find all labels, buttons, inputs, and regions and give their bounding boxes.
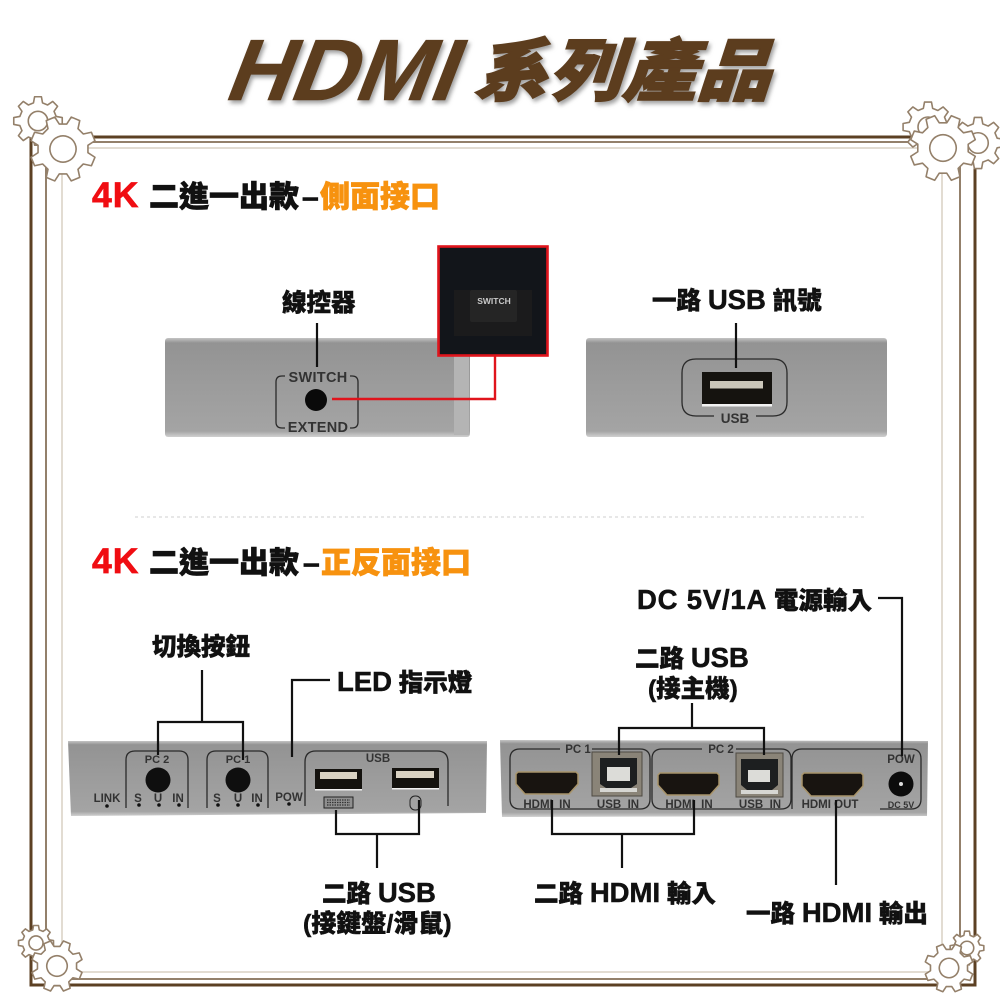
PC 2 group bracket — [126, 751, 188, 808]
heading: side ports: – — [302, 181, 319, 214]
label: two HDMI inputs: 二路 HDMI 輸入 — [534, 877, 716, 908]
callout: switch close-up — [438, 246, 548, 356]
title: 系列產品 — [468, 34, 790, 110]
device body: front — [68, 741, 487, 816]
rear panel labels: HDMI IN — [523, 799, 571, 811]
rear panel labels: HDMI IN — [665, 799, 713, 811]
rear panel labels — [523, 744, 915, 811]
front panel labels: S — [213, 793, 221, 805]
label: two USB keyboard and mouse: 二路 USB — [322, 877, 436, 908]
indicator dots — [105, 802, 291, 808]
PC 2 bracket — [652, 749, 791, 809]
label: one USB signal: 一路 USB 訊號 — [652, 284, 822, 315]
heading: front and rear ports: 正反面接口 — [321, 547, 471, 580]
HDMI out bracket — [792, 749, 921, 809]
icon: top-left gears — [14, 97, 106, 192]
switch port label: SWITCH — [288, 370, 348, 386]
USB B ports — [592, 752, 783, 797]
extend port label: EXTEND — [288, 420, 348, 436]
pointer line: DC input — [878, 598, 902, 756]
label: two USB to host: (接主機) — [648, 674, 738, 703]
device body: side left — [165, 338, 470, 437]
label: two USB to host — [635, 642, 749, 703]
heading: side ports: 4K — [92, 175, 139, 215]
pointer line to USB — [735, 323, 737, 368]
device body: rear — [500, 740, 928, 817]
front panel labels: U — [154, 793, 162, 805]
rear panel labels: DC 5V — [888, 800, 914, 810]
switch port bracket — [276, 376, 358, 428]
pointer line to switch — [316, 323, 318, 367]
panel: rear view — [500, 740, 928, 817]
switch buttons — [146, 768, 250, 792]
front panel labels: PC 1 — [226, 754, 250, 766]
front panel labels: POW — [275, 792, 303, 804]
label: two USB keyboard and mouse — [303, 877, 452, 938]
rear panel labels: USB IN — [597, 799, 639, 811]
icon: top-right gears — [900, 102, 1000, 191]
rear panel labels: PC 1 — [565, 744, 591, 756]
front panel labels: U — [234, 793, 242, 805]
front panel labels — [94, 753, 390, 805]
heading: front and rear ports: – — [303, 547, 320, 580]
pointer line: HDMI output — [835, 800, 837, 885]
PC 1 bracket — [510, 749, 650, 809]
front panel labels: LINK — [94, 793, 121, 805]
label: switch button: 切換按鈕 — [152, 633, 250, 661]
title — [215, 22, 790, 119]
icon: bottom-left gears — [18, 925, 90, 999]
front panel labels: S — [134, 793, 142, 805]
pointer lines: switch buttons — [158, 670, 243, 760]
USB ports: keyboard and mouse — [315, 768, 439, 790]
callout: switch close-up: SWITCH — [477, 296, 511, 306]
heading: side ports: 二進一出款 — [149, 181, 299, 214]
heading: front and rear ports: 4K — [92, 541, 139, 581]
USB group bracket — [305, 751, 448, 806]
title: HDMI — [215, 22, 481, 119]
panel: front view — [68, 741, 487, 816]
front panel labels: PC 2 — [145, 754, 169, 766]
HDMI ports — [516, 772, 863, 796]
DC power jack — [888, 772, 914, 796]
switch port hole — [305, 389, 327, 411]
panel: side view with switch — [165, 246, 548, 437]
USB port bracket — [682, 359, 787, 416]
red connector line — [332, 356, 495, 399]
pointer lines: keyboard and mouse USB — [336, 800, 419, 868]
rear panel labels: PC 2 — [708, 744, 734, 756]
USB label: USB — [721, 411, 749, 426]
pointer line: LED — [292, 680, 330, 757]
device body: side right — [586, 338, 887, 437]
label: cable controller: 線控器 — [282, 288, 356, 317]
icon: bottom-right gears — [917, 931, 984, 1000]
label: two USB to host: 二路 USB — [635, 642, 749, 673]
rear panel labels: HDMI OUT — [802, 799, 858, 811]
PC 1 group bracket — [207, 751, 268, 808]
label: DC input: DC 5V/1A 電源輸入 — [637, 584, 872, 615]
label: two USB keyboard and mouse: (接鍵盤/滑鼠) — [303, 909, 452, 938]
front panel labels: USB — [366, 753, 390, 765]
USB port — [702, 372, 772, 406]
rear panel labels: USB IN — [739, 799, 781, 811]
rear panel labels: POW — [887, 754, 915, 766]
pointer lines: HDMI inputs — [552, 800, 694, 868]
heading: front and rear ports: 二進一出款 — [149, 547, 299, 580]
divider — [135, 516, 865, 518]
icon: keyboard — [324, 797, 353, 808]
panel: side view with USB — [586, 323, 887, 437]
label: one HDMI output: 一路 HDMI 輸出 — [746, 897, 928, 928]
front panel labels: IN — [251, 793, 263, 805]
label: LED: LED 指示燈 — [337, 666, 473, 697]
pointer lines: USB host — [619, 703, 764, 755]
icon: mouse — [410, 796, 421, 810]
heading: side ports: 側面接口 — [320, 181, 440, 214]
front panel labels: IN — [172, 793, 184, 805]
